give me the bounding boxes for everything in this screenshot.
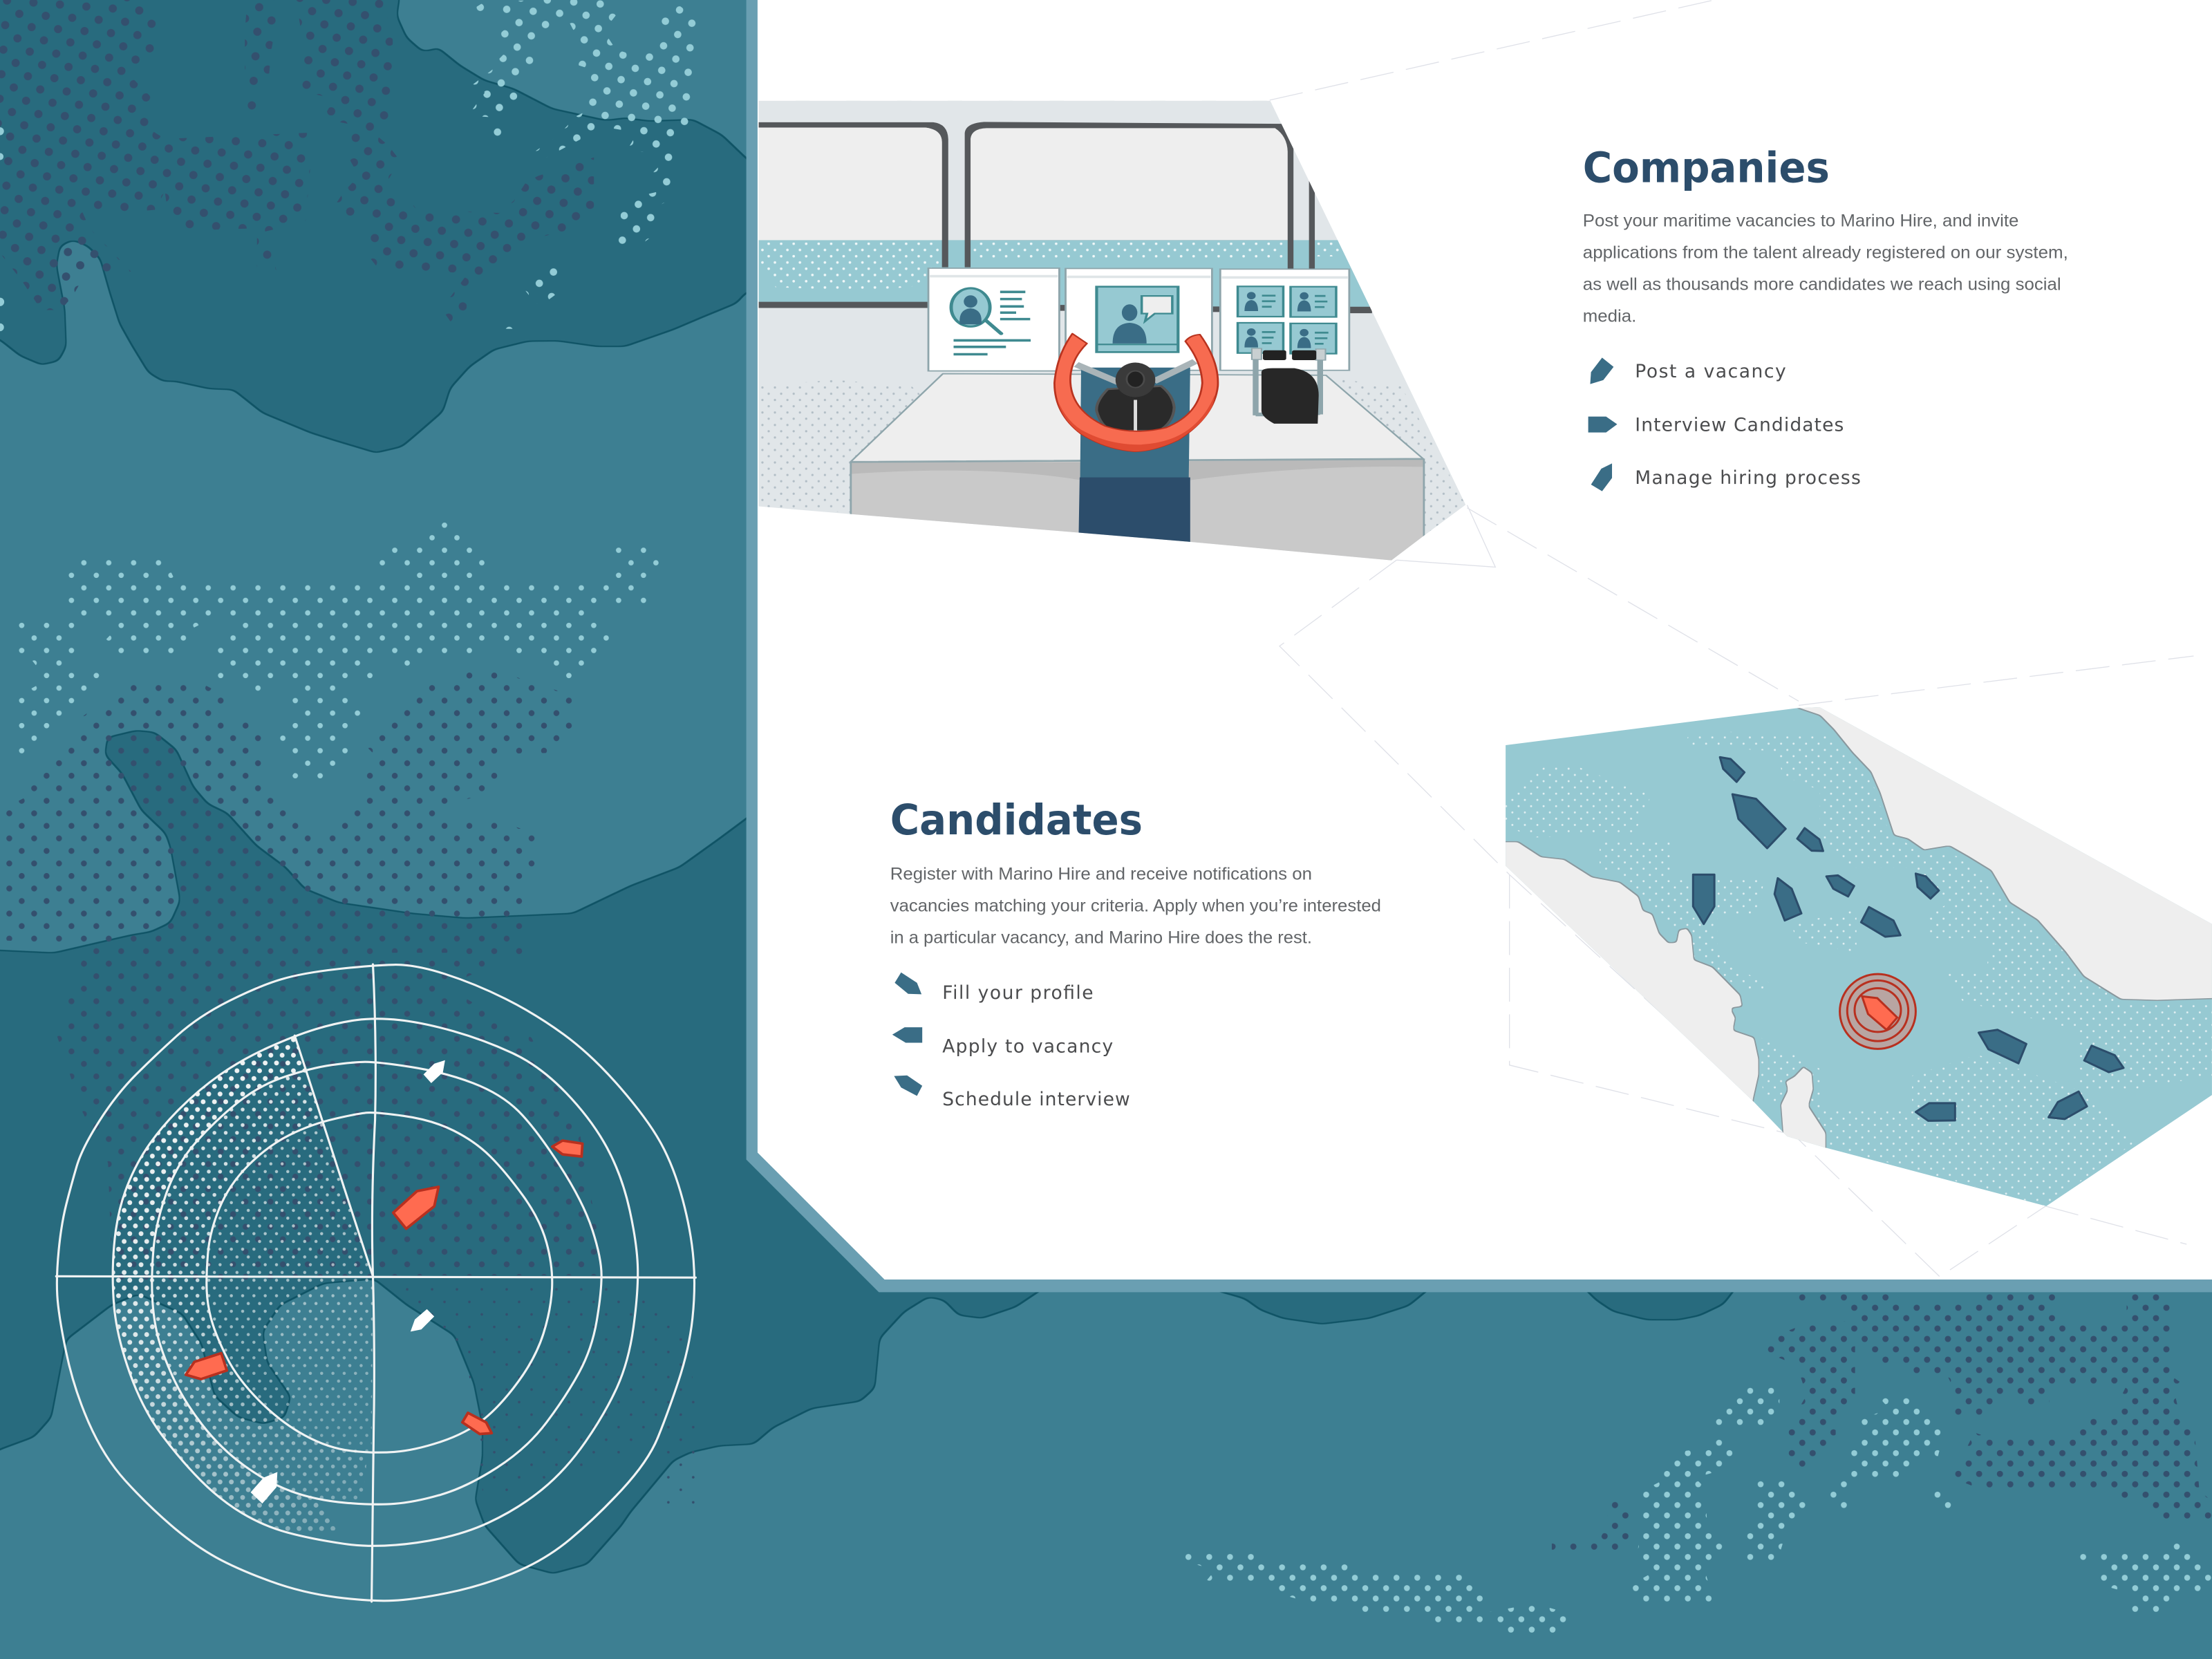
dark dot patches: top left [0, 0, 594, 321]
icon: boat manage [1591, 463, 1612, 491]
deep water: middle and radar region [0, 730, 1100, 1575]
light dot patches: bottom right [1185, 1388, 2211, 1633]
light dots on left edge [0, 127, 4, 331]
radar [56, 964, 695, 1602]
deep water bays under the panel [1199, 1255, 1750, 1324]
card: video interview [1066, 268, 1212, 371]
sea map with boats [1486, 684, 2212, 1220]
dark dot patches: bottom right [1552, 1270, 2212, 1552]
text block: Companies description: applications from the talent already registered on our system, [1583, 243, 2068, 262]
land: north-east coast [1792, 684, 2212, 1001]
text block: Companies description: as well as thousands more candidates we reach using social [1583, 274, 2061, 294]
label: post a vacancy: Post a vacancy [1635, 361, 1786, 382]
window: left [759, 122, 948, 268]
radar sweep dots [113, 1038, 373, 1531]
label: schedule interview: Schedule interview [942, 1089, 1130, 1110]
radar rings and axes [56, 964, 695, 1602]
icon: boat apply [892, 1027, 922, 1043]
label: manage hiring process: Manage hiring process [1635, 467, 1861, 489]
text block: Companies description [1583, 212, 2068, 326]
deep water: top region [0, 0, 795, 453]
radar boats: white [251, 1060, 445, 1503]
land: peninsula [1780, 1066, 1826, 1164]
text block: Candidates description: Register with Marino Hire and receive notifications on [890, 864, 1312, 883]
label: fill your profile: Fill your profile [942, 982, 1094, 1004]
icon: boat schedule [894, 1076, 922, 1096]
panel: white content card with border [747, 0, 2212, 1292]
card: resume search [928, 268, 1059, 371]
small dots: radar lower right [406, 1288, 695, 1504]
dashed guide lines [1270, 0, 2193, 1277]
radar boats: red [186, 1141, 583, 1434]
fleet boats [1693, 757, 2124, 1121]
icon: boat post [1590, 357, 1613, 384]
dark dot patches: radar area [57, 953, 597, 1280]
text block: Companies description: media. [1583, 306, 1636, 326]
window sill [759, 302, 1372, 313]
sea through windows [759, 240, 1372, 308]
text block: Candidates description [890, 864, 1381, 947]
text block: Candidates description: in a particular vacancy, and Marino Hire does the rest. [890, 928, 1312, 947]
label: apply to vacancy: Apply to vacancy [942, 1035, 1113, 1057]
highlighted boat with sonar rings [1840, 974, 1915, 1049]
text block: Candidates description: vacancies matching your criteria. Apply when you’re interested [890, 896, 1381, 915]
light dot patches: top right [473, 0, 695, 329]
text block: Companies description: Post your maritime vacancies to Marino Hire, and invite [1583, 212, 2018, 231]
heading: Companies: Companies [1583, 144, 1830, 192]
throttle [1252, 348, 1326, 424]
dark dot patches: middle [6, 673, 572, 954]
light dot patches: middle [19, 523, 659, 778]
icon: boat profile [894, 973, 921, 994]
illustration: boat bridge with helm [759, 101, 1465, 561]
steering wheel [1054, 334, 1218, 451]
dashed top edge of illustration [759, 100, 1270, 101]
list: Candidates steps [892, 973, 1130, 1110]
console [851, 374, 1424, 562]
icon: boat interview [1588, 417, 1618, 433]
card: candidate grid [1220, 269, 1349, 371]
list: Companies steps [1588, 357, 1861, 491]
helm column [1078, 368, 1190, 543]
land: south-west coast [1486, 841, 1759, 1129]
label: interview candidates: Interview Candidates [1635, 414, 1844, 435]
heading: Candidates: Candidates [890, 796, 1143, 845]
window: right [965, 122, 1293, 269]
